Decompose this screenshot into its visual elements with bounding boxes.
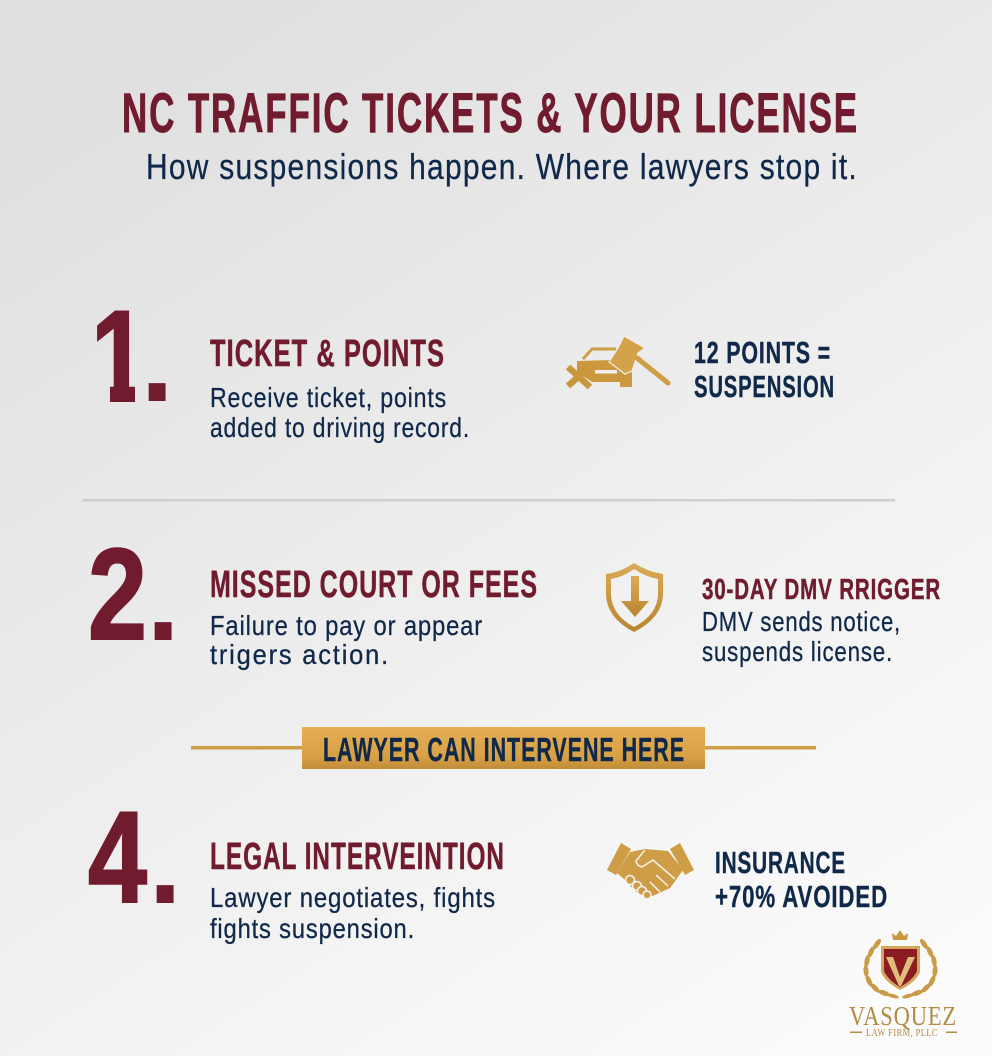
- logo: Vasquez Law Firm: [849, 930, 957, 1039]
- callout: 30-day DMV trigger: DMV sends notice,: [702, 606, 901, 637]
- step 4 heading: LEGAL INTERVEINTION: [210, 836, 505, 878]
- step 2: missed court or fees: [88, 521, 941, 670]
- step number 4: 4: [88, 784, 147, 930]
- step 4 description: [210, 882, 496, 944]
- icon: crest shield: [881, 946, 920, 990]
- step 4 description: fights suspension.: [210, 913, 415, 944]
- callout: insurance plus 70 percent avoided: +70% AVOIDED: [715, 879, 888, 914]
- step 2 heading: MISSED COURT OR FEES: [210, 564, 538, 606]
- callout: 12 points equals suspension: [694, 335, 835, 404]
- step 4 description: Lawyer negotiates, fights: [210, 882, 496, 913]
- callout: 30-day DMV trigger: suspends license.: [702, 636, 893, 667]
- step 2 description: Failure to pay or appear: [210, 610, 483, 641]
- divider: [82, 499, 895, 502]
- step 2 description: trigers action.: [210, 639, 390, 670]
- step 2 description: [210, 610, 483, 670]
- step 1 description: Receive ticket, points: [210, 382, 447, 413]
- step number 2: 2: [88, 521, 147, 667]
- step number 4: .: [148, 795, 182, 929]
- callout: 30-day DMV trigger: [702, 574, 941, 667]
- callout: insurance plus 70 percent avoided: INSURANCE: [715, 845, 846, 880]
- banner: lawyer can intervene here: [191, 727, 816, 769]
- step 1 description: [210, 382, 470, 443]
- banner: lawyer can intervene here: LAWYER CAN INTERVENE HERE: [323, 731, 685, 768]
- icon: shield with down arrow: [606, 563, 663, 632]
- step number 2: .: [146, 532, 180, 666]
- step 1: ticket and points: [97, 310, 833, 444]
- step 1 heading: TICKET & POINTS: [210, 333, 445, 375]
- logo wordmark: VASQUEZ: [849, 1001, 957, 1031]
- subtitle: How suspensions happen. Where lawyers stop it.: [146, 146, 858, 187]
- icon: crown: [892, 930, 908, 940]
- callout: 12 points equals suspension: SUSPENSION: [694, 369, 835, 404]
- step 1 description: added to driving record.: [210, 412, 470, 443]
- callout: insurance plus 70 percent avoided: [715, 845, 888, 914]
- icon: laurel wreath: [863, 938, 938, 999]
- step number 1: [97, 310, 166, 402]
- step number 1: 1: [91, 283, 147, 429]
- callout: 12 points equals suspension: 12 POINTS =: [694, 335, 831, 370]
- icon: handshake: [607, 843, 694, 899]
- step number 1: .: [140, 293, 174, 427]
- step 4: legal intervention: [88, 784, 888, 944]
- icon: car and gavel: [568, 336, 668, 387]
- logo tagline: LAW FIRM, PLLC: [866, 1028, 938, 1039]
